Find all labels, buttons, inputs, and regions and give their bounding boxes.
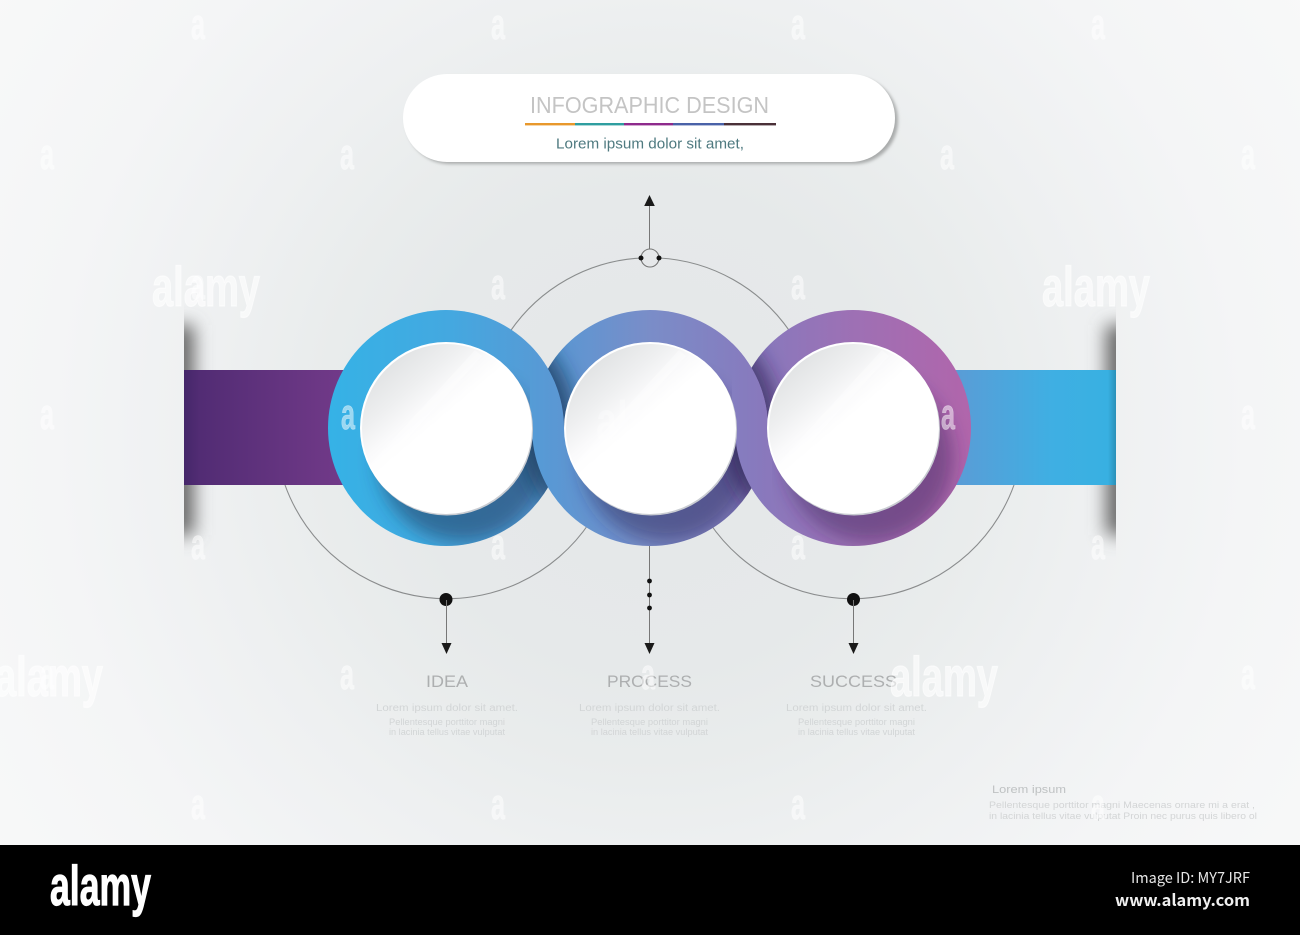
band: right blue [951, 370, 1116, 485]
text block: success: SUCCESS [810, 672, 897, 691]
watermark: alamy logos: alamy [890, 645, 998, 708]
watermark: alamy logos: alamy [1042, 255, 1150, 318]
watermark: small marks: a [491, 0, 505, 49]
watermark: small marks: a [491, 520, 505, 569]
disc: left [360, 342, 533, 516]
footnote: Lorem ipsum [992, 784, 1066, 796]
text block: process: PROCESS [607, 672, 692, 691]
footer bar [0, 845, 1300, 935]
subtitle: Lorem ipsum dolor sit amet, [556, 136, 744, 152]
watermark: small marks: a [40, 390, 54, 439]
watermark: small marks: a [340, 650, 354, 699]
disc: middle [564, 342, 737, 516]
ring: middle [532, 310, 768, 546]
text block: idea: in lacinia tellus vitae vulputat [389, 727, 505, 737]
arrow with dots: process [644, 546, 654, 654]
watermark: small marks: a [1241, 390, 1255, 439]
node and arrow: success [847, 593, 860, 654]
text block: success: Lorem ipsum dolor sit amet. [786, 703, 927, 714]
watermark: small marks: a [40, 650, 54, 699]
watermark: alamy logos [0, 255, 1150, 708]
watermark: small marks: a [491, 260, 505, 309]
watermark: small marks: a [940, 130, 954, 179]
node: top ring with dots [638, 249, 662, 267]
arrow: up from top node [644, 195, 655, 249]
title text: INFOGRAPHIC DESIGN [530, 92, 769, 118]
ring overlap: right over middle [736, 428, 772, 514]
watermark: faint logo on middle disc: alamy [596, 389, 704, 452]
watermark: alamy logos: alamy [152, 255, 260, 318]
text block: process [579, 672, 720, 737]
title pill [403, 74, 898, 164]
ring: right [752, 310, 971, 546]
watermark: small marks: a [1091, 0, 1105, 49]
watermark: small marks: a [341, 390, 355, 439]
text block: process: Pellentesque porttitor magni [591, 717, 708, 727]
watermark: small marks: a [791, 780, 805, 829]
watermark: small marks: a [641, 650, 655, 699]
footnote: in lacinia tellus vitae vulputat Proin nec purus quis libero ol [989, 811, 1257, 822]
watermark: small marks: a [791, 0, 805, 49]
text block: idea: IDEA [426, 672, 469, 691]
watermark: small marks: a [791, 520, 805, 569]
arc: left bottom connector [285, 485, 590, 599]
node and arrow: idea [440, 593, 452, 654]
ring overlap: middle upper right clean [732, 343, 768, 428]
watermark: small marks: a [191, 780, 205, 829]
watermark: small marks: a [791, 260, 805, 309]
watermark: small marks: a [1241, 650, 1255, 699]
watermark: small marks: a [941, 390, 955, 439]
text block: success: in lacinia tellus vitae vulputat [798, 727, 915, 737]
footnote: Pellentesque porttitor magni Maecenas ornare mi a erat , [989, 800, 1255, 811]
watermark: small marks: a [191, 260, 205, 309]
footnote [989, 784, 1257, 822]
footer logo: alamy [50, 854, 151, 917]
text block: idea [376, 672, 518, 737]
watermark: small marks: a [491, 780, 505, 829]
footer image id: Image ID: MY7JRF [1131, 867, 1250, 888]
watermark: small marks: a [191, 520, 205, 569]
disc: right [767, 342, 940, 516]
text block: success: Pellentesque porttitor magni [798, 717, 915, 727]
band: left purple [184, 370, 349, 485]
rainbow underline [525, 123, 776, 125]
footer url: www.alamy.com [1115, 887, 1250, 911]
text block: success [786, 672, 927, 737]
text block: idea: Pellentesque porttitor magni [389, 717, 505, 727]
text block: idea: Lorem ipsum dolor sit amet. [376, 703, 518, 714]
watermark: small marks: a [40, 130, 54, 179]
band shadow: right [1106, 325, 1134, 535]
watermark: small marks: a [1091, 780, 1105, 829]
ring overlap: left over middle [530, 345, 564, 428]
ring: left [328, 310, 548, 546]
watermark: small marks: a [191, 0, 205, 49]
watermark: small marks: a [1091, 520, 1105, 569]
watermark: small marks: a [1241, 130, 1255, 179]
arc: right bottom connector [709, 485, 1014, 599]
watermark: small marks: a [340, 130, 354, 179]
band shadow: left [166, 325, 194, 535]
arc: top connector [510, 258, 790, 332]
text block: process: Lorem ipsum dolor sit amet. [579, 703, 720, 714]
text block: process: in lacinia tellus vitae vulputat [591, 727, 708, 737]
